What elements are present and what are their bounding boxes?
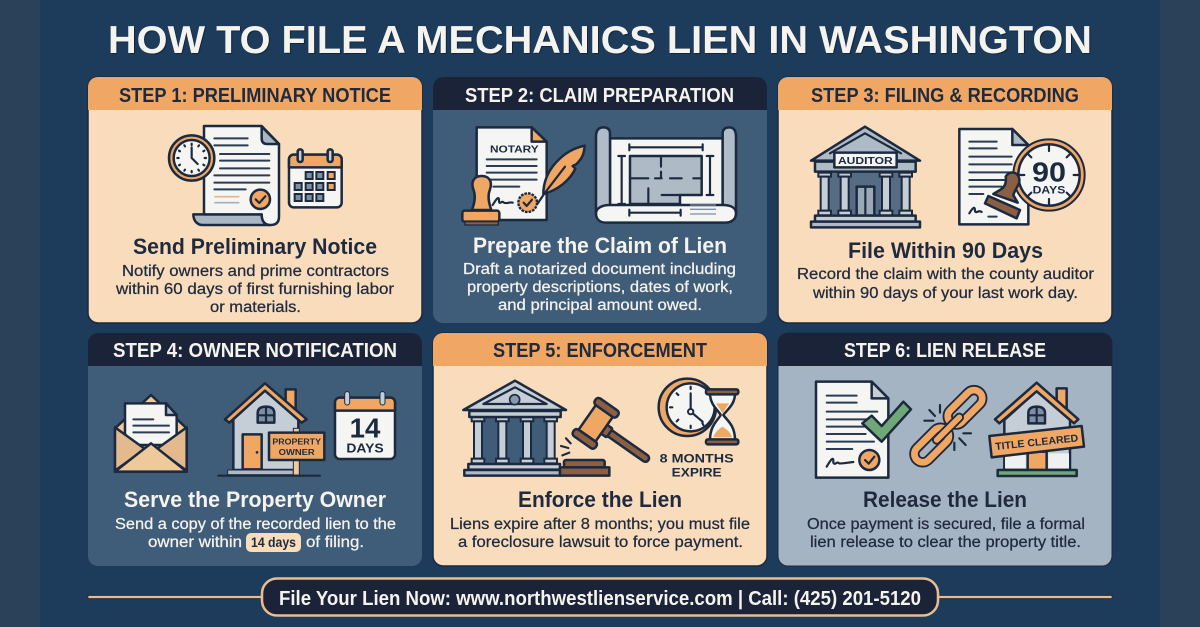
text block: step 2 description: Draft a notarized document including (463, 261, 736, 278)
text block: step 5 description: a foreclosure lawsuit to force payment. (458, 534, 743, 551)
text block: step 5 description: Liens expire after 8 months; you must file (450, 516, 750, 533)
text block: step 1 description: or materials. (210, 299, 301, 316)
icon: courthouse, gavel, clock and hourglass (463, 379, 738, 480)
title: HOW TO FILE A MECHANICS LIEN IN WASHINGTON (108, 19, 1092, 62)
text block: step 6 description: Once payment is secured, file a formal (807, 516, 1085, 533)
text block: step 6 description: lien release to clear the property title. (810, 534, 1081, 551)
icon: courthouse, gavel, clock and hourglass: EXPIRE (672, 467, 722, 480)
icon: notary document, stamp, quill and blueprint: NOTARY (490, 145, 539, 156)
heading: step 6: STEP 6: LIEN RELEASE (844, 339, 1046, 362)
text block: step 3 description: within 90 days of your last work day. (812, 285, 1078, 302)
panel: step 6 lien release (778, 333, 1112, 566)
footer call to action: File Your Lien Now: www.northwestlienservice.com | Call: (425) 201-5120 (279, 588, 921, 610)
heading: step 4: STEP 4: OWNER NOTIFICATION (113, 339, 397, 362)
heading: step 1: STEP 1: PRELIMINARY NOTICE (119, 84, 391, 107)
icon: envelope, house with sign and 14 days calendar: PROPERTY (272, 438, 322, 447)
text block: step 3 description: Record the claim with the county auditor (797, 266, 1094, 283)
text block: step 1 description (115, 263, 394, 316)
icon: auditor building, document, stamp and 90 days clock (811, 127, 1085, 227)
panel: step 5 enforcement (433, 333, 767, 566)
text block: step 5 description (450, 516, 750, 551)
panel: step 3 filing and recording (778, 77, 1112, 323)
icon: envelope, house with sign and 14 days calendar: DAYS (346, 441, 384, 455)
heading: step 2: STEP 2: CLAIM PREPARATION (465, 84, 734, 107)
icon: courthouse, gavel, clock and hourglass: 8 MONTHS (660, 452, 734, 465)
heading: step 3: STEP 3: FILING & RECORDING (811, 84, 1079, 107)
icon: released document, broken chain and cleared house (816, 382, 1084, 478)
text block: step 6 description (807, 516, 1085, 551)
text block: step 3 description (797, 266, 1094, 302)
heading: enforce the lien: Enforce the Lien (518, 487, 682, 512)
text block: step 2 description (463, 261, 736, 314)
text block: step 4 description: owner within (148, 534, 242, 551)
text block: step 1 description: Notify owners and prime contractors (122, 263, 389, 280)
icon: auditor building, document, stamp and 90 days clock: 90 (1032, 157, 1066, 188)
panel: step 2 claim preparation (433, 77, 767, 323)
panel: step 1 preliminary notice (88, 77, 422, 323)
heading: file within 90 days: File Within 90 Days (848, 238, 1043, 263)
text block: step 4 description: of filing. (306, 534, 364, 551)
heading: release the lien: Release the Lien (863, 487, 1027, 512)
icon: released document, broken chain and cleared house: TITLE CLEARED (995, 433, 1079, 453)
heading: send preliminary notice: Send Preliminary Notice (133, 234, 377, 259)
heading: serve the property owner: Serve the Property Owner (124, 487, 386, 512)
icon: auditor building, document, stamp and 90 days clock: DAYS (1033, 184, 1065, 196)
text block: step 1 description: within 60 days of first furnishing labor (115, 281, 394, 298)
icon: envelope, house with sign and 14 days calendar (115, 383, 395, 476)
footer call to action (88, 578, 1112, 616)
icon: auditor building, document, stamp and 90 days clock: AUDITOR (838, 156, 893, 167)
panel: step 4 owner notification (88, 333, 422, 566)
icon: notary document, stamp, quill and blueprint (462, 127, 736, 225)
icon: document, clock and calendar (169, 126, 342, 225)
icon: envelope, house with sign and 14 days calendar: 14 (350, 412, 381, 443)
heading: prepare the claim of lien: Prepare the Claim of Lien (473, 233, 727, 258)
icon: envelope, house with sign and 14 days calendar: OWNER (279, 448, 315, 457)
text block: step 4 description: Send a copy of the recorded lien to the (115, 516, 396, 533)
heading: step 5: STEP 5: ENFORCEMENT (493, 339, 707, 362)
text block: step 4 description (115, 516, 396, 551)
text block: step 2 description: and principal amount owed. (498, 297, 702, 314)
callout: 14 days highlight: 14 days (251, 535, 296, 550)
text block: step 2 description: property descriptions, dates of work, (467, 279, 733, 296)
